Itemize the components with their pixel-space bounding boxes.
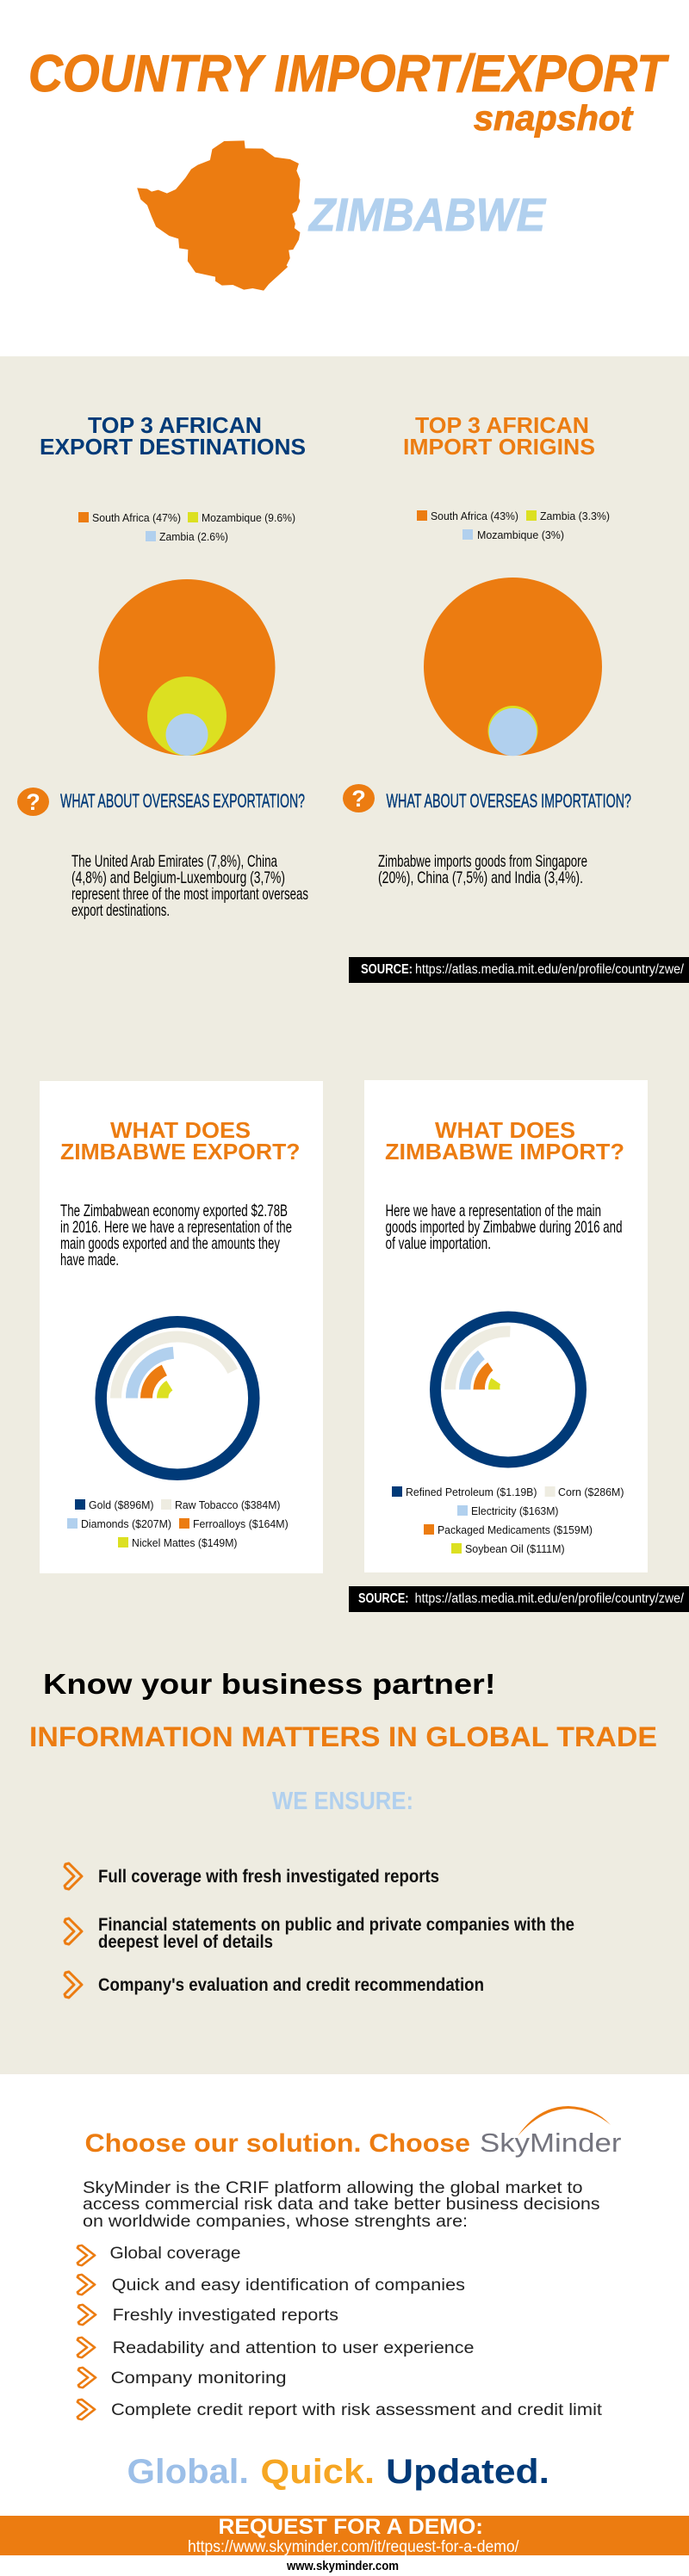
heading: we ensure: WE ENSURE: (272, 1788, 413, 1815)
header (28, 45, 669, 291)
logo: SkyMinder: SkyMinder (480, 2128, 622, 2158)
panel: top 3 African import origins (403, 414, 610, 756)
heading: export (60, 1119, 301, 1164)
bullet: complete credit report: Complete credit report with risk assessment and credit limit (111, 2401, 603, 2419)
bullet: readability: Readability and attention to user experience (113, 2339, 474, 2357)
source bar one: SOURCE: (361, 962, 413, 977)
bullet: full coverage: Full coverage with fresh investigated reports (98, 1867, 439, 1887)
legend: export destinations: South Africa (47%) (92, 511, 181, 524)
heading: import: ZIMBABWE IMPORT? (385, 1140, 624, 1164)
legend: import goods (392, 1486, 624, 1555)
legend: import goods: Soybean Oil ($111M) (465, 1542, 565, 1555)
panel: overseas exportation (17, 788, 308, 920)
text block: import (386, 1202, 622, 1253)
text block: SkyMinder description: SkyMinder is the CRIF platform allowing the global market to (83, 2179, 582, 2197)
footer website: www.skyminder.com (286, 2559, 399, 2573)
legend: export destinations: Zambia (2.6%) (159, 530, 228, 543)
text block: export (60, 1202, 292, 1269)
heading: import (385, 1119, 624, 1164)
legend: export goods: Ferroalloys ($164M) (193, 1517, 289, 1530)
panel: overseas importation (343, 784, 631, 887)
heading: export destinations: EXPORT DESTINATIONS (40, 436, 306, 460)
text block: export: in 2016. Here we have a representation of the (60, 1218, 292, 1237)
slogan: Updated. (386, 2453, 549, 2491)
chart: radial bars export (101, 1322, 254, 1474)
legend: export goods: Raw Tobacco ($384M) (175, 1498, 281, 1511)
icon: question mark (343, 784, 375, 812)
bullet: company evaluation (65, 1972, 484, 1998)
legend: import origins (417, 510, 610, 541)
country name: ZIMBABWE (307, 189, 547, 241)
source bar two (349, 1586, 689, 1612)
icon: question mark: ? (26, 789, 40, 815)
legend: import goods: Packaged Medicaments ($159M) (438, 1523, 593, 1536)
slogan (127, 2453, 549, 2491)
text block: export: main goods exported and the amounts they (60, 1234, 280, 1253)
heading: export: ZIMBABWE EXPORT? (60, 1140, 301, 1164)
bullet: quick identification: Quick and easy identification of companies (112, 2276, 465, 2295)
panel: beige background (0, 356, 689, 2074)
panel: top 3 African export destinations (40, 414, 306, 756)
heading: overseas exportation: WHAT ABOUT OVERSEAS EXPORTATION? (60, 790, 305, 812)
text block: overseas exportation (71, 852, 308, 920)
bullet: financial statements: Financial statements on public and private companies with the (98, 1915, 574, 1935)
text block: overseas exportation: (4,8%) and Belgium-Luxembourg (3,7%) (71, 868, 285, 887)
heading: know your business partner: Know your business partner! (43, 1668, 496, 1700)
text block: overseas exportation: represent three of the most important overseas (71, 885, 308, 904)
bullet: freshly investigated (78, 2305, 338, 2325)
card background (364, 1080, 648, 1572)
source bar two: SOURCE: (358, 1591, 408, 1606)
heading: import origins (403, 414, 595, 460)
bullet: financial statements (65, 1915, 574, 1952)
icon: question mark: ? (351, 786, 366, 812)
bullet: global coverage (78, 2245, 241, 2265)
bullet: financial statements: deepest level of details (98, 1932, 273, 1952)
logo: SkyMinder (480, 2106, 622, 2158)
text block: overseas importation: Zimbabwe imports goods from Singapore (378, 852, 587, 871)
subtitle: snapshot (474, 98, 634, 138)
legend: export goods: Nickel Mattes ($149M) (132, 1536, 238, 1549)
panel: choose our solution (78, 2106, 622, 2491)
text block: SkyMinder description: access commercial risk data and take better business decisions (83, 2196, 599, 2214)
text block: export: The Zimbabwean economy exported $2.78B (60, 1202, 288, 1220)
bullet: company evaluation: Company's evaluation and credit recommendation (98, 1975, 484, 1995)
text block: import: of value importation. (386, 1234, 491, 1253)
legend: export goods: Diamonds ($207M) (81, 1517, 171, 1530)
heading: export destinations: TOP 3 AFRICAN (88, 414, 262, 438)
legend: import origins: Mozambique (3%) (477, 528, 564, 541)
map of Zimbabwe (137, 140, 300, 291)
legend: export destinations (78, 511, 295, 543)
bullet: global coverage: Global coverage (110, 2245, 241, 2263)
text block: overseas exportation: The United Arab Emirates (7,8%), China (71, 852, 277, 871)
legend: import origins: South Africa (43%) (431, 510, 518, 522)
text block: overseas importation (378, 852, 587, 887)
source bar one (349, 957, 689, 983)
legend: import origins: Zambia (3.3%) (540, 510, 610, 522)
chart: radial bars import (436, 1317, 580, 1462)
heading: export destinations (40, 414, 306, 460)
text block: overseas exportation: export destinations. (71, 901, 170, 920)
slogan: Global. (127, 2453, 249, 2491)
legend: export goods: Gold ($896M) (89, 1498, 153, 1511)
panel: what does Zimbabwe import (364, 1080, 648, 1572)
panel: what does Zimbabwe export (40, 1081, 323, 1573)
text block: export: have made. (60, 1251, 119, 1269)
text block: SkyMinder description (83, 2179, 599, 2231)
heading: export: WHAT DOES (110, 1119, 251, 1143)
chart: nested circles import (424, 578, 602, 756)
text block: overseas importation: (20%), China (7,5%) and India (3,4%). (378, 868, 583, 887)
card background (40, 1081, 323, 1573)
panel: know your business partner (29, 1668, 657, 1998)
call to action bar (0, 2515, 689, 2556)
legend: export destinations: Mozambique (9.6%) (202, 511, 295, 524)
legend: export goods (67, 1498, 289, 1549)
legend: import goods: Electricity ($163M) (471, 1504, 558, 1517)
heading: import: WHAT DOES (435, 1119, 575, 1143)
bullet: freshly investigated: Freshly investigated reports (113, 2307, 338, 2325)
chart: nested circles export (98, 579, 276, 756)
heading: import origins: TOP 3 AFRICAN (415, 414, 589, 438)
bullet: company monitoring: Company monitoring (111, 2369, 287, 2388)
heading: import origins: IMPORT ORIGINS (403, 436, 595, 460)
heading: choose our solution: Choose our solution. Choose (84, 2129, 470, 2158)
call to action bar: REQUEST FOR A DEMO: (219, 2515, 483, 2539)
heading: information matters: INFORMATION MATTERS IN GLOBAL TRADE (29, 1721, 657, 1752)
bullet: full coverage (65, 1863, 439, 1889)
icon: question mark (17, 788, 49, 816)
text block: SkyMinder description: on worldwide companies, whose strenghts are: (83, 2213, 468, 2231)
call to action bar: https://www.skyminder.com/it/request-for-a-demo/ (188, 2538, 519, 2556)
legend: import goods: Corn ($286M) (558, 1486, 624, 1498)
slogan: Quick. (260, 2453, 375, 2491)
bullet: company monitoring (78, 2368, 287, 2388)
legend: import goods: Refined Petroleum ($1.19B) (406, 1486, 537, 1498)
